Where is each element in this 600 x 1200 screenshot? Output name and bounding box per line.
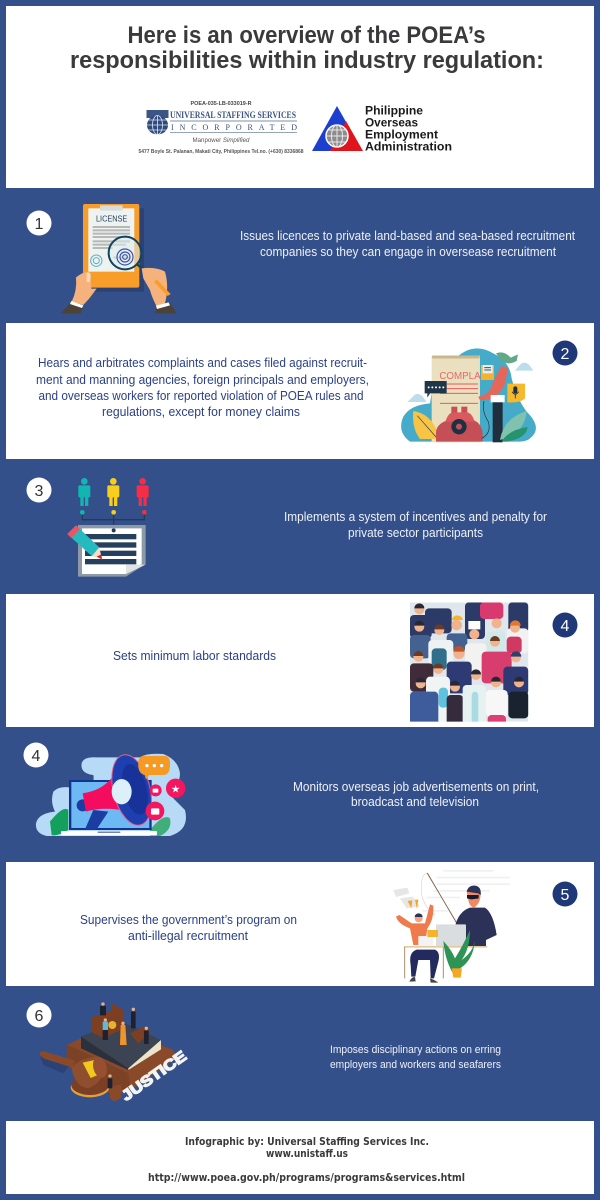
icon: license clipboard: LICENSE: [96, 215, 127, 224]
text: item 1: [240, 229, 575, 259]
text: item 5: anti-illegal recruitment: [128, 929, 249, 943]
number badge 4 second: 4: [32, 748, 41, 765]
text: item 1: companies so they can engage in oversease recruitment: [260, 245, 556, 259]
text: item 5: [80, 913, 297, 943]
footer text: Infographic by: Universal Staffing Services Inc.: [185, 1136, 429, 1148]
icon: megaphone and laptop: ★: [171, 783, 181, 795]
panel: item 3: [26, 478, 547, 577]
footer text: www.unistaff.us: [266, 1148, 348, 1160]
number badge 3: 3: [35, 483, 44, 500]
text: item 3: [284, 510, 547, 540]
icon: complaint telephone: [401, 348, 536, 442]
text: item 4: Sets minimum labor standards: [113, 649, 276, 663]
number badge 3: [26, 478, 52, 502]
number badge 6: 6: [35, 1008, 44, 1025]
number badge 4: 4: [561, 618, 570, 635]
panel: item 4 job advertisements: [24, 742, 539, 836]
logo: Universal Staffing Services: UNIVERSAL STAFFING SERVICES: [170, 110, 296, 120]
panel: item 6: [26, 1002, 501, 1105]
number badge 2: 2: [561, 346, 570, 363]
logo: Philippine Overseas Employment Administration: Overseas: [365, 116, 418, 130]
number badge 5: 5: [561, 887, 570, 904]
icon: license clipboard: [61, 204, 177, 313]
icon: crowd of workers: [410, 602, 528, 727]
logo: Philippine Overseas Employment Administration: Administration: [365, 140, 452, 154]
text: item 1: Issues licences to private land-based and sea-based recruitment: [240, 229, 575, 243]
text: item 2: ment and manning agencies, foreign principals and employers,: [36, 373, 369, 387]
title: responsibilities within industry regulation:: [70, 47, 544, 74]
panel: header: [6, 6, 594, 188]
logo: Philippine Overseas Employment Administration: Employment: [365, 128, 438, 142]
panel: footer credits: [6, 1121, 594, 1194]
panel: item 4 labor standards: [6, 594, 594, 727]
text: item 4 second: [293, 780, 539, 809]
logo: Universal Staffing Services: 5477 Boyle St. Palanan, Makati City, Philippines Tel.no. (+630) 8336868: [138, 149, 304, 155]
icon: megaphone and laptop: [36, 751, 186, 836]
text: item 4 second: Monitors overseas job advertisements on print,: [293, 780, 539, 794]
logo: Universal Staffing Services: INCORPORATED: [171, 123, 297, 132]
panel: item 5: [6, 862, 594, 986]
text: item 6: Imposes disciplinary actions on erring: [330, 1044, 501, 1056]
text: item 2: [36, 356, 369, 419]
logo: Philippine Overseas Employment Administration: [312, 104, 452, 154]
title: [70, 22, 544, 74]
logo: Universal Staffing Services: [138, 101, 304, 155]
icon: justice gavel and court: [39, 1002, 190, 1105]
text: item 2: regulations, except for money claims: [102, 405, 300, 419]
number badge 5: [552, 882, 578, 906]
number badge 4: [552, 612, 578, 638]
text: item 6: [330, 1044, 501, 1071]
footer text: [148, 1136, 465, 1184]
footer text: http://www.poea.gov.ph/programs/programs&services.html: [148, 1172, 465, 1184]
text: item 5: Supervises the government’s program on: [80, 913, 297, 927]
number badge 1: 1: [35, 216, 44, 233]
icon: justice gavel and court: JUSTICE: [119, 1048, 190, 1105]
text: item 3: private sector participants: [348, 526, 483, 540]
number badge 1: [26, 210, 52, 236]
text: item 3: Implements a system of incentives and penalty for: [284, 510, 547, 524]
number badge 4 second: [24, 742, 48, 768]
icon: scammer fishing recruit: [393, 870, 510, 983]
text: item 2: and overseas workers for reported violation of POEA rules and: [38, 389, 364, 403]
logo: Universal Staffing Services: Manpower Simplified: [192, 137, 250, 144]
text: item 6: employers and workers and seafarers: [330, 1059, 501, 1071]
icon: people and document: [67, 478, 149, 577]
number badge 6: [26, 1002, 52, 1028]
text: item 2: Hears and arbitrates complaints and cases filed against recruit-: [38, 356, 367, 370]
panel: item 2: [6, 323, 594, 459]
text: item 4 second: broadcast and television: [351, 795, 479, 809]
logo: Universal Staffing Services: POEA-035-LB-033019-R: [190, 101, 252, 107]
title: Here is an overview of the POEA’s: [128, 22, 486, 49]
panel: item 1: [26, 204, 575, 313]
number badge 2: [552, 340, 578, 366]
logo: Philippine Overseas Employment Administration: Philippine: [365, 104, 423, 118]
icon: complaint telephone: COMPLA: [439, 371, 481, 382]
